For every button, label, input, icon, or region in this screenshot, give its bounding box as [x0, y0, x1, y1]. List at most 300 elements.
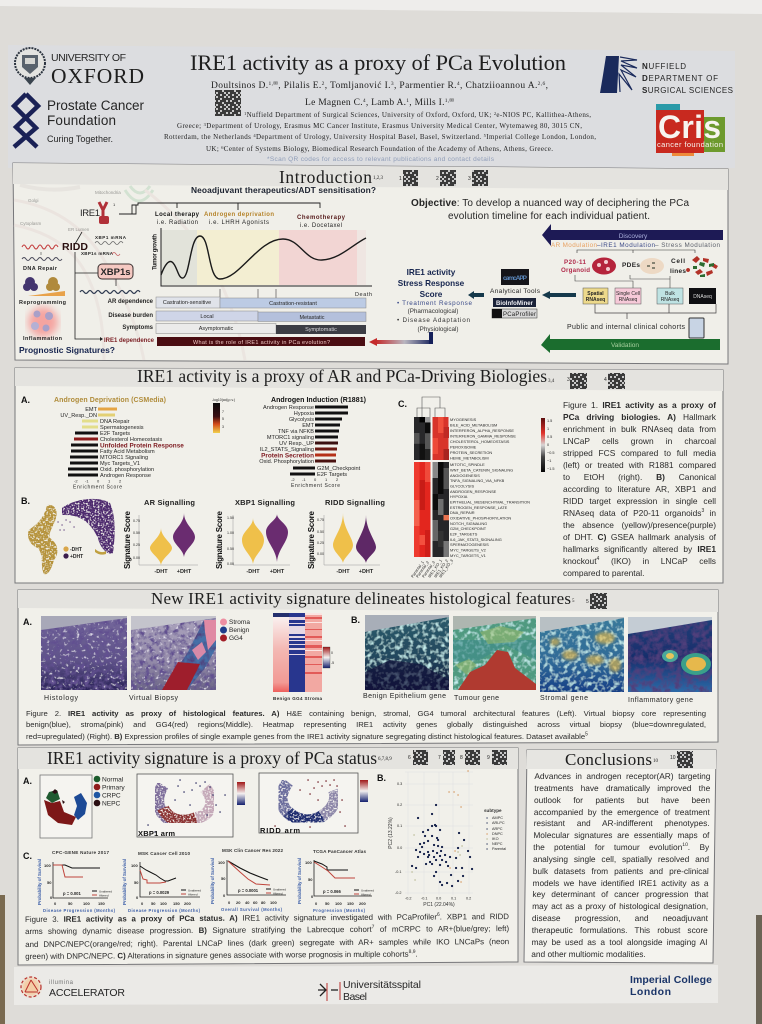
authors: 4: [363, 98, 366, 104]
UMAP: RIDD arm: [259, 773, 358, 835]
icon: IRE1 receptor: 1: [113, 202, 116, 207]
logo: Illumina Accelerator: [21, 977, 125, 999]
chart A: androgen deprivation: EMT: [85, 407, 98, 413]
chart A: androgen induction: -2: [291, 477, 295, 482]
chart A: androgen induction: MTORC1 signaling: [267, 435, 314, 441]
scatter plot B: PCA subtypes: PC1 (22.04%): [423, 902, 455, 908]
authors: 2: [322, 81, 325, 87]
survival plot: MSK Cancer Cell: 50: [151, 901, 156, 906]
chart A: androgen induction: Protein Secretion: [261, 452, 314, 460]
survival plot: TCGA PanCancer: 50: [325, 901, 330, 906]
survival plot: MSK Clin Cancer Res: MSK Clin Cancer Res 2022: [222, 848, 283, 853]
survival plot: MSK Cancer Cell: Probability of Survival: [122, 859, 127, 905]
violin: RIDD signalling: RIDD Signalling: [325, 498, 385, 507]
violin: AR signalling: +DHT: [177, 569, 192, 575]
scatter plot B: PCA subtypes: -0.2: [405, 896, 412, 900]
chart A: androgen deprivation: A.: [21, 395, 30, 405]
logo: University of Oxford: OXFORD: [51, 64, 144, 88]
row: AR dependence: AR dependence: [108, 299, 154, 305]
chart A: androgen induction: 2: [336, 477, 339, 482]
assay: single cell: Single Cell: [616, 291, 640, 297]
chart A: androgen deprivation: Myc Targets_V1: [100, 461, 140, 467]
chart: tumor growth curve: Death: [355, 292, 372, 298]
violin: AR signalling: 0.00: [133, 556, 140, 560]
introduction heading band: 2: [436, 176, 439, 182]
affiliations: 1: [244, 111, 246, 116]
assay: spatial: Spatial: [587, 291, 604, 297]
violin: XBP1 signalling: 0.50: [227, 547, 234, 551]
survival plot: TCGA PanCancer: Probability of Survival: [297, 858, 302, 904]
prognostic question: Prognostic Signatures?: [19, 345, 115, 355]
assay: bulk: [657, 288, 683, 304]
authors: ,: [546, 81, 548, 91]
heatmap C: hallmark GSEA: OXIDATIVE_PHOSPHORYLATION: [450, 516, 511, 520]
scatter plot B: PCA subtypes: 0.3: [397, 782, 402, 786]
arrow: discovery: Discovery: [619, 233, 648, 240]
conclusions heading band: Conclusions: [565, 750, 652, 769]
logo: Illumina Accelerator: ACCELERATOR: [49, 987, 125, 999]
survival plot: MSK Cancer Cell: 0: [141, 901, 144, 906]
stress response score: Score: [420, 290, 443, 299]
discovery model: organoid: Organoid: [561, 267, 590, 274]
faint cell labels: Golgi: [28, 198, 39, 203]
title: IRE1 activity as a proxy of PCa Evolution: [190, 50, 566, 75]
introduction heading band: Introduction: [279, 167, 372, 187]
scatter plot B: PCA subtypes: IKO: [492, 837, 499, 841]
logo: Cris cancer foundation: Cris: [658, 109, 721, 145]
chart A: androgen deprivation: Cholesterol Homeostasis: [100, 437, 162, 443]
discovery model: PDEs: PDEs: [622, 262, 640, 269]
QR code: contact: [215, 90, 241, 116]
logo: University of Oxford: [15, 48, 144, 88]
survival plot: MSK Clin Cancer Res: 100: [218, 860, 225, 865]
legend: regions: GG4: [229, 635, 243, 642]
authors: 1: [406, 98, 409, 104]
survival plot: CPC-GENE: p = 0.001: [63, 891, 81, 896]
survival plot: TCGA PanCancer: TCGA PanCancer Atlas: [313, 849, 366, 854]
conclusions text: Molecular signatures are essentially maps of: [533, 830, 710, 840]
legend: disease states: NEPC: [102, 800, 121, 808]
survival plot: CPC-GENE: Unaltered: [99, 890, 112, 894]
XBP1 pathway: XBP1 mRNA: [95, 235, 127, 240]
heatmap C: hallmark GSEA: [398, 397, 554, 579]
chart A: androgen deprivation: 2: [119, 478, 122, 484]
survival plot: CPC-GENE: Probability of Survival: [37, 859, 42, 905]
authors: , Pilalis E.: [278, 81, 321, 91]
survival plot: CPC-GENE: CPC-GENE Nature 2017: [52, 850, 109, 855]
heatmap C: hallmark GSEA: Parental_2: [415, 559, 430, 579]
panel: figure 3: [18, 748, 518, 966]
survival plot: MSK Clin Cancer Res: 50: [221, 876, 226, 881]
image: virtual biopsy: Virtual Biopsy: [129, 695, 178, 702]
figure 1 caption: according to literature AR, XBP1 and: [563, 484, 716, 494]
assay: spatial: [583, 288, 608, 304]
chart A: androgen induction: EMT: [302, 423, 315, 429]
logo: Universitätsspital Basel: [318, 979, 421, 1003]
row: symptoms: Symptomatic: [305, 327, 337, 333]
figure 2 caption: benign(blue), stroma(pink) and GG4(red) regions(Middle). Heatmap representing IRE1 activity genes globally distinguished across virtual biopsy (blue=downregulated,: [26, 720, 706, 729]
violin: RIDD signalling: -DHT: [336, 569, 350, 575]
heatmap C: hallmark GSEA: BILE_ACID_METABOLISM: [450, 422, 497, 428]
assay: bulk: Bulk: [665, 291, 675, 297]
survival plot: CPC-GENE: 0: [50, 895, 53, 900]
conclusions text: therapeutic formulations. This robust score: [532, 925, 708, 935]
row: AR dependence: Castration-sensitive: [163, 300, 211, 306]
figure 2 heading band: [18, 589, 718, 612]
row: AR dependence: [108, 297, 366, 308]
violin: AR signalling: AR Signalling: [144, 498, 195, 507]
legend: disease states: Normal: [102, 776, 124, 784]
analytical tools: Analytical Tools: [490, 288, 541, 295]
scatter plot B: PCA subtypes: DNPC: [492, 832, 503, 836]
neoadjuvant question: Neoadjuvant therapeutics/ADT sensitisation?: [191, 185, 376, 195]
scatter plot B: PCA subtypes: 0.1: [451, 896, 456, 900]
violin: AR signalling: -DHT: [154, 569, 168, 575]
affiliations: UK;: [206, 145, 219, 153]
affiliations: Rotterdam, the Netherlands: [164, 133, 251, 141]
chart A: androgen induction: 0: [314, 477, 317, 482]
faint cell labels: ER Lumen: [68, 227, 90, 232]
survival plot: MSK Clin Cancer Res: 80: [261, 900, 266, 905]
analytical tools: camcAPP: [503, 275, 528, 282]
scatter plot B: PCA subtypes: -0.1: [395, 870, 402, 874]
scatter plot B: PCA subtypes: AMPC: [492, 816, 503, 820]
survival plot: MSK Clin Cancer Res: p = 0.0001: [238, 888, 259, 893]
assay: bulk: RNAseq: [661, 297, 680, 303]
row: symptoms: Symptoms: [122, 325, 154, 331]
scatter plot B: PCA subtypes: PC2 (13.22%): [388, 817, 394, 849]
affiliations: Imperial College London, London,: [486, 133, 596, 141]
authors: Doultsinos D.: [211, 81, 268, 91]
row: AR dependence: Castration-resistant: [269, 301, 317, 307]
survival plot: TCGA PanCancer: Unaltered: [361, 888, 374, 892]
violin: XBP1 signalling: [215, 498, 295, 575]
heatmap C: hallmark GSEA: Parental_3: [421, 559, 436, 579]
logo: Prostate Cancer Foundation: Foundation: [47, 113, 116, 128]
figure 1 caption: (left) or treated with R1881 compared: [563, 460, 716, 470]
survival plot: MSK Cancer Cell: 150: [173, 901, 180, 906]
discovery model: PDEs: [622, 258, 664, 274]
heatmap: benign GG4 stroma: Benign GG4 Stroma: [273, 696, 322, 701]
violin: AR signalling: 0.25: [133, 543, 140, 547]
survival plot: TCGA PanCancer: 200: [359, 901, 366, 906]
logo: Nuffield Department of Surgical Sciences: [600, 56, 733, 95]
heatmap C: hallmark GSEA: NOTCH_SIGNALING: [450, 521, 487, 526]
cohorts: Public and internal clinical cohorts: [567, 324, 686, 331]
conclusions heading band: [526, 750, 716, 769]
faint cell labels: [20, 190, 121, 232]
figure 3 caption: arms showing dynamic disease progression. B) Signature stratifying the Labrecque cohort7 of mCRPC to AR+(blue/grey; left): [25, 924, 509, 936]
chart A: androgen deprivation: Androgen Response: [100, 473, 151, 479]
affiliations: Greece;: [177, 122, 201, 130]
stress response score: IRE1 activity: [407, 268, 456, 277]
modulation line: –IRE1 Modulation: [597, 242, 655, 249]
survival plot: TCGA PanCancer: 0: [311, 894, 314, 899]
survival plot: TCGA PanCancer: Progression (Months): [313, 908, 366, 913]
RIDD pathway: RIDD: [62, 241, 88, 253]
authors: 2,6: [538, 81, 546, 87]
heatmap C: hallmark GSEA: WNT_BETA_CATENIN_SIGNALING: [450, 468, 513, 472]
figure 3 heading band: IRE1 activity signature is a proxy of PCa status: [47, 748, 377, 768]
introduction heading band: 3: [468, 176, 471, 182]
arrows: IRE1 to therapies: [119, 203, 320, 214]
chart A: androgen induction: Enrichment Score: [291, 483, 340, 489]
arrow: validation: [541, 334, 720, 353]
row: disease burden: [108, 311, 366, 322]
chart A: androgen induction: Glycolysis: [289, 417, 314, 423]
legend: disease states: CRPC: [102, 792, 121, 800]
QR scan note: *Scan QR codes for access to relevant publications and contact details: [267, 156, 495, 163]
therapy labels: Local therapy: [155, 212, 200, 218]
assays: [583, 288, 716, 304]
survival plot: TCGA PanCancer: 100: [335, 901, 342, 906]
logo: Imperial College London: [630, 974, 712, 998]
figure 1 heading band: 3,4: [548, 379, 555, 384]
therapy labels: Chemotherapy: [297, 215, 346, 221]
figure 1 caption: Figure 1. IRE1 activity as a proxy of: [563, 400, 716, 410]
chart A: androgen induction: Androgen Response: [263, 405, 314, 411]
authors: 3: [391, 81, 394, 87]
heatmap C: hallmark GSEA: G2M_CHECKPOINT: [450, 526, 487, 531]
discovery model: organoid: [561, 258, 616, 274]
figure 2 caption: [26, 708, 706, 744]
conclusions text: bulk datasets from patients and pre-clinical: [533, 866, 709, 876]
figure 1 caption: LNCaP cells grown in charcoal: [563, 436, 716, 446]
survival plot: MSK Clin Cancer Res: 40: [245, 900, 250, 905]
chart A: androgen induction: -1: [302, 477, 306, 482]
panel: figure 1: [15, 366, 723, 583]
violin: XBP1 signalling: -DHT: [246, 569, 260, 575]
violin: RIDD signalling: 0.00: [317, 552, 324, 556]
icon: inflammation: [23, 307, 63, 342]
heatmap C: hallmark GSEA: IRE1_KO_2: [433, 558, 450, 579]
stress response score: [397, 268, 472, 333]
colour scale: log10 adj p: -log10(adj.p.v.): [212, 398, 235, 402]
survival plot: MSK Clin Cancer Res: Probability of Survival: [210, 858, 215, 904]
icon: reprogramming proteins: Reprogramming: [19, 300, 66, 306]
logo: Nuffield Department of Surgical Sciences: DEPARTMENT OF: [642, 74, 718, 83]
figure 3 heading band: 6: [408, 755, 411, 761]
conclusions heading band: 10: [653, 759, 658, 764]
analytical tools: BioInfoMiner: [496, 301, 534, 307]
UMAP: XBP1 arm: [137, 774, 233, 838]
legend: regions: Benign: [229, 627, 250, 634]
logo: Imperial College London: London: [630, 986, 671, 998]
discovery model: cell lines: [670, 256, 718, 277]
image: tumour gene: Tumour gene: [454, 695, 499, 702]
discovery model: organoid: P20-11: [564, 259, 587, 266]
colour scale: log10 adj p: 3: [222, 425, 224, 429]
colour scale: RIDD: [360, 780, 368, 802]
affiliations: Department of Urology, University Hospital Basel, Basel, Switzerland.: [256, 133, 483, 141]
figure 3 heading band: [18, 748, 518, 769]
chart A: androgen deprivation: 0: [97, 478, 100, 484]
scatter plot B: PCA subtypes: [377, 771, 506, 908]
chart A: androgen deprivation: UV_Resp._DN: [60, 413, 97, 419]
survival plot: MSK Cancer Cell: Disease Progression (Months): [128, 908, 201, 913]
panel: introduction: [13, 163, 728, 364]
chart A: androgen deprivation: Fatty Acid Metabolism: [100, 449, 155, 455]
violin: XBP1 signalling: 1.00: [227, 531, 234, 535]
figure 3 caption: and DNPC/NEPC(orange/red; right). Parental LNCaP lines (dark green) segregate with AR+ samples while IKO LNCaPs (neon: [25, 937, 509, 949]
logo: Nuffield Department of Surgical Sciences: SURGICAL SCIENCES: [642, 86, 733, 95]
scatter plot B: PCA subtypes: B.: [377, 773, 386, 783]
therapy labels: Androgen deprivation: [204, 212, 274, 218]
logo: Prostate Cancer Foundation: Curing Together.: [47, 134, 113, 144]
scatter plot B: PCA subtypes: Parental: [492, 847, 506, 851]
RIDD pathway: [22, 232, 103, 341]
authors: [211, 81, 548, 108]
logo: Cris cancer foundation: [656, 104, 725, 156]
chart A: androgen deprivation: -1: [85, 478, 89, 484]
affiliations: Department of Urology, Erasmus MC Cancer Institute, Erasmus University Medical Center, Wytemaweg 80, 3015 CN,: [206, 122, 582, 130]
footer band: [14, 965, 718, 1005]
stress response score: (Pharmacological): [408, 308, 458, 315]
introduction heading band: 1,2,3: [373, 176, 384, 181]
heatmap C: hallmark GSEA: IRE1_KO_3: [438, 558, 455, 579]
heatmap C: hallmark GSEA: IRE1_KO_1: [427, 558, 444, 579]
conclusions text: may be used as a tool alongside imaging AI: [531, 937, 708, 947]
legend: disease states: Primary: [102, 784, 125, 792]
analytical tools: PCaProfiler: [503, 312, 536, 318]
heatmap C: hallmark GSEA: C.: [398, 399, 407, 409]
objective: Objective: To develop a nuanced way of deciphering the PCa: [411, 198, 689, 209]
timeline rows: [104, 297, 366, 346]
heatmap C: hallmark GSEA: MITOTIC_SPINDLE: [450, 462, 485, 467]
conclusions text: disease progression, and neoadjuvant: [532, 913, 708, 923]
heatmap: benign GG4 stroma: 0: [331, 651, 333, 655]
icon: IRE1 receptor: [80, 202, 116, 224]
authors: , Tomljanović I.: [325, 81, 391, 91]
conclusions text: resistant and AR-indifferent phenotypes.: [534, 818, 710, 828]
arrow: tools to score: [468, 291, 484, 299]
affiliations: 4: [253, 133, 256, 138]
image: histology: [41, 616, 127, 702]
heatmap C: hallmark GSEA: −1.5: [547, 467, 554, 471]
violin: RIDD signalling: 0.75: [317, 518, 324, 522]
authors: 4: [457, 81, 460, 87]
colour scale: XBP1: [237, 782, 245, 805]
heatmap: benign GG4 stroma: -5: [331, 661, 334, 665]
survival plot: MSK Clin Cancer Res: Overall Survival (Months): [221, 907, 283, 912]
violin: RIDD signalling: 0.25: [317, 541, 324, 545]
image: benign epithelium gene: Benign Epithelium gene: [363, 693, 446, 700]
chart A: androgen deprivation: 1: [108, 478, 111, 484]
chart A: androgen induction: 1: [325, 477, 328, 482]
figure 2 caption: Figure 2. IRE1 activity as proxy of histological features. A) H&E containing benign, stromal, GG4 tumoral architectural features (Left). Virtual biopsy core representing: [26, 709, 706, 718]
modulation line: – Stress Modulation: [655, 242, 720, 249]
heatmap C: hallmark GSEA: MYOGENESIS: [450, 417, 477, 422]
heatmap C: hallmark GSEA: CHOLESTEROL_HOMEOSTASIS: [450, 439, 510, 444]
heatmap C: hallmark GSEA: TNFA_SIGNALING_VIA_NFKB: [450, 478, 505, 483]
XBP1 pathway: XBP1s mRNA: [81, 251, 114, 256]
survival plot: CPC-GENE: 50: [68, 901, 73, 906]
survival plot: CPC-GENE: 100: [83, 901, 90, 906]
violin: XBP1 signalling: +DHT: [270, 569, 285, 575]
heatmap C: hallmark GSEA: 1: [547, 427, 549, 431]
UMAP: disease state: [40, 775, 92, 838]
row: disease burden: Metastatic: [299, 315, 325, 321]
logo: Cris cancer foundation: cancer foundation: [657, 140, 723, 149]
survival plot: MSK Cancer Cell: p = 0.0029: [149, 890, 170, 895]
chart A: androgen deprivation: MTORC1 Signaling: [100, 455, 148, 461]
chart A: androgen deprivation: Unfolded Protein Response: [100, 442, 184, 450]
chart A: androgen deprivation: DNA Repair: [100, 419, 130, 425]
figure 2 heading band: 5: [572, 599, 575, 604]
legend: regions: [220, 618, 250, 642]
panel: figure 2: [18, 589, 718, 745]
assay: DNA: DNAseq: [693, 294, 712, 300]
survival plot: MSK Cancer Cell: 200: [184, 901, 191, 906]
image: inflammatory gene: [628, 617, 712, 704]
figure 1 caption: enrichment in bulk RNAseq data from: [563, 424, 716, 434]
violin: XBP1 signalling: 0.00: [227, 562, 234, 566]
violin: RIDD signalling: +DHT: [359, 569, 374, 575]
affiliations: e-NIOS PC, Kallithea-Athens,: [496, 111, 591, 119]
figure 1 caption: to EtOH (right). B) Canonical: [563, 472, 716, 482]
heatmap C: hallmark GSEA: HEME_METABOLISM: [450, 456, 489, 460]
image: histology: Histology: [44, 695, 78, 702]
figure 1 caption: [563, 399, 716, 583]
therapy labels: [155, 212, 346, 229]
figure 2 caption: red=upregulated) (Right). B) Expression profiles of single example genes from the IRE1 activity signature segregating distinct histological features. Dataset available5: [26, 731, 588, 741]
logo: Imperial College London: Imperial College: [630, 974, 712, 986]
chart A: androgen induction: UV Resp._UP: [279, 441, 314, 447]
affiliations: [164, 111, 596, 153]
figure 1 heading band: [15, 366, 723, 391]
XBP1 pathway: [80, 235, 140, 294]
figure 3 caption: green) with DNPC/NEPC. C) Alterations in signature genes associate with worse prognosis in multiple cohorts8,9.: [25, 949, 418, 961]
conclusions text: [531, 771, 711, 963]
survival plot: CPC-GENE: 0: [54, 901, 57, 906]
figure 1 caption: RNAseq data of P20-11 organoids3 in: [563, 508, 716, 518]
figure 3 heading band: 8: [460, 755, 463, 761]
chart A: androgen induction: Oxid. Phosphorylation: [259, 459, 314, 465]
heatmap C: hallmark GSEA: INTERFERON_ALPHA_RESPONSE: [450, 428, 514, 433]
survival plot: MSK Cancer Cell: Altered: [188, 892, 198, 896]
logo: University of Oxford: UNIVERSITY OF: [51, 52, 126, 64]
RIDD pathway: DNA Repair: [23, 266, 58, 272]
chart A: androgen deprivation: -2: [74, 478, 78, 484]
affiliations: Center of Systems Biology, Biomedical Research Foundation of the Academy of Athens, Athens, Greece.: [224, 145, 553, 153]
assay: single cell: RNAseq: [619, 297, 638, 303]
chart A: androgen induction: Hypoxia: [294, 411, 315, 417]
survival plot: TCGA PanCancer: 100: [305, 860, 312, 865]
connectors: [575, 275, 670, 288]
scatter plot B: PCA subtypes: ARLPC: [492, 821, 505, 825]
scatter plot B: PCA subtypes: -0.2: [395, 891, 402, 895]
scatter plot B: PCA subtypes: subtype: [484, 808, 502, 813]
heatmap C: hallmark GSEA: 0.5: [547, 435, 552, 439]
figure 2 heading band: 5: [586, 599, 589, 605]
chart A: androgen deprivation: Spermatogenesis: [100, 425, 144, 431]
stress response score: (Physiological): [418, 326, 458, 333]
survival plot: TCGA PanCancer: 50: [308, 877, 313, 882]
figure 1 heading band: IRE1 activity is a proxy of AR and PCa-Driving Biologies: [137, 366, 547, 386]
violin: XBP1 signalling: Signature Score: [215, 510, 224, 569]
figure 3 heading band: 9: [487, 755, 490, 761]
figure 1 caption: hallmarks significantly altered by IRE1: [563, 544, 716, 554]
survival plot: MSK Clin Cancer Res: 20: [236, 900, 241, 905]
authors: 1,✉: [268, 81, 278, 87]
colour scale: log10 adj p: 7: [222, 410, 224, 414]
survival plot: MSK Cancer Cell: MSK Cancer Cell 2010: [138, 851, 190, 856]
chart A: androgen deprivation: Oxid. phosphorylation: [100, 467, 154, 473]
image: benign epithelium gene: [363, 615, 449, 700]
survival plot: TCGA PanCancer: [297, 849, 374, 913]
survival plot: CPC-GENE: Disease Progression (Months): [43, 908, 116, 913]
survival plot: MSK Clin Cancer Res: 100: [270, 900, 277, 905]
